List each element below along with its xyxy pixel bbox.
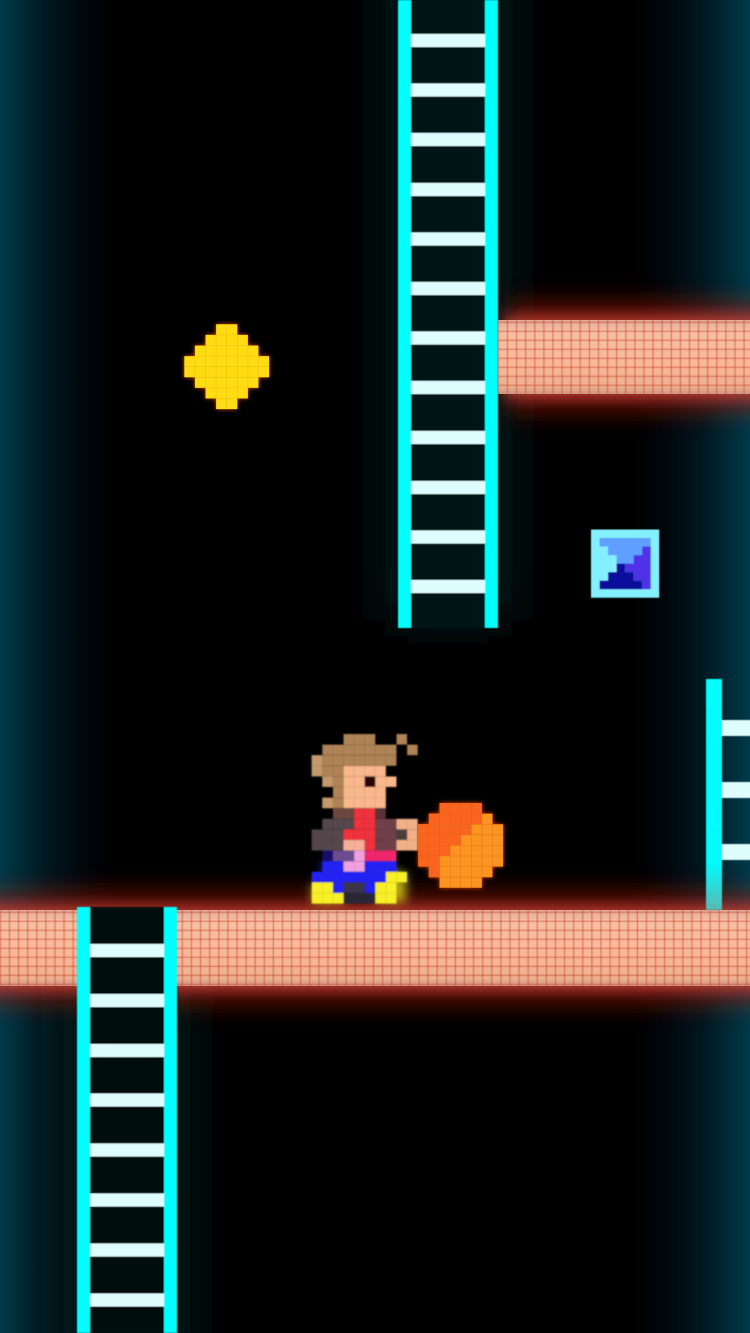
character [312,734,418,904]
jacket right [375,808,396,851]
ball: orange [418,803,503,888]
platform glow tight [505,316,750,398]
belly hand [344,840,365,851]
floor glow wide [0,896,750,1000]
trousers [312,861,396,893]
platform glow wide [505,306,750,408]
sleeve shadow [396,829,407,840]
floor glow tight [0,906,750,990]
left edge glow [0,0,115,1333]
jacket left [312,808,354,851]
ladder: bottom left [77,907,177,1333]
ladder: top centre [398,0,498,628]
ladder halo: bottom left [64,930,190,1333]
purple wedge [625,547,651,589]
right edge glow [635,0,750,1333]
ladder halo: top [385,0,511,620]
face [344,766,396,808]
hand [396,819,418,851]
shoe left [312,882,344,904]
feet glow [312,862,406,902]
sprite cell lines [312,734,418,904]
outer tile [591,530,659,598]
platform: lower floor [0,896,750,1000]
waist right [365,851,396,861]
ladder: right edge [706,679,750,910]
hair highlight [312,755,333,808]
hair [312,734,418,808]
pickup: blue square [591,530,659,598]
platform: upper right [498,306,750,408]
shoe right [375,872,407,904]
ball lit side [418,803,503,888]
pink hand [354,851,365,861]
eye [365,776,375,787]
shirt [344,808,375,851]
gem: yellow diamond [184,324,269,409]
navy wedge [600,564,642,589]
light blue wedge [600,538,651,564]
ball shaded side [418,803,482,877]
waist left [322,851,333,861]
shadow between legs [344,882,365,893]
